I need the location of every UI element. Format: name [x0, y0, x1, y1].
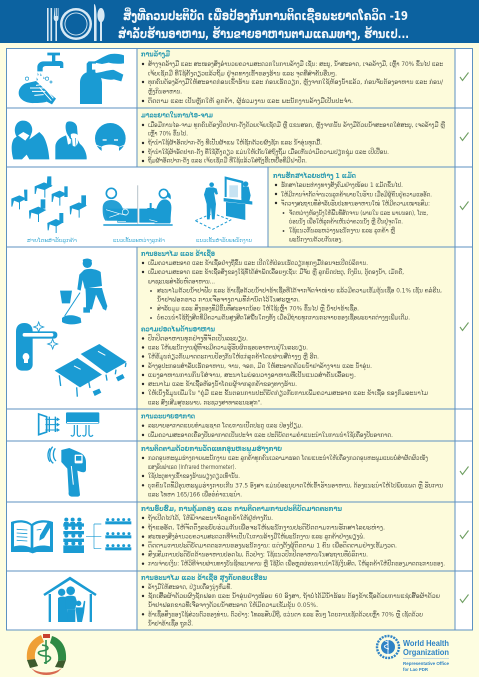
- text: temperature screening: ແລະ ໂທຫາ 165/166 ເພື່ອຂໍຄຳແນະນຳ.: [148, 491, 242, 498]
- caption: customer table spacing: ສາຍໂຕະສຳລັບລູກຄ້າ: [27, 237, 77, 244]
- text: temperature screening: ກວດອຸນຫະພູມຮ່າງກາຍພະນັກງານ ແລະ ລູກຄ້າທຸກຄົນເວລາມາຮອດ ໂດຍແນະນຳໃຫ້ເຄື່ອງກວດອຸນຫະພູມແບບບໍ່ສຳຜັດຜິວໜັງ: [148, 455, 428, 462]
- text: cough etiquette: ຖ້ານຳໃຊ້ຜ້າອັດປາກ-ດັງ ທີ່ໃຊ້ຄັ້ງດຽວ ແມ່ນໃຫ້ເກັບໃສ່ຖົງຖິ້ມ ເມື່ອເຫັນວ່າມີຄວາມປຽກຊຸ່ມ ແລະ ເປິເປື້ອນ.: [148, 148, 389, 157]
- text: hand washing: ຕິດຕາມ ແລະ ເປັນຫຼັກໃຫ້ ລູກຄ້າ, ຜູ້ຮ່ວມງານ ແລະ ພະນັກງານລ້າງມືເປັນປະຈຳ.: [148, 97, 353, 105]
- text: food safety: ໃຫ້ຂໍ້ມູນກ່ຽວກັບມາດຕະການປ້ອງກັນໃຫ້ແກ່ລູກຄ້າໂດຍຜ່ານສື່ຕ່າງໆ ຫຼື ຮີດ.: [148, 353, 319, 361]
- text: temperature screening: ໃຊ້ປະຕູທາງເຂົ້າຂອງຮ້ານພຽງດຽວເທົ່ານັ້ນ.: [148, 473, 240, 480]
- text: training and monitoring: ສະໜອງສິ່ງອຳນວຍຄວາມສະດວກທີ່ຈຳເປັນໃນການລ້າງມືໃຫ້ພະນັກງານ ແລະ ລູກຄ້າຢ່າງພຽງພໍ.: [148, 533, 365, 541]
- illustration: distanced tables, screens and staff: [11, 176, 252, 233]
- text: cleaning and disinfection: ນ້ຳຢາຟອກຂາວ ການເຈືອຈາງຕາມທີ່ກຳນົດໄວ້ໃນສະຫຼາກ.: [157, 295, 300, 303]
- text: temperature screening: ບຸກຄົນໃດທີ່ມີອຸນຫະພູມຮ່າງກາຍເກີນ 37.5 ອົງສາ ແມ່ນບໍ່ອະນຸຍາດໃຫ້ເຂົ້າຮ້ານອາຫານ, ຕ້ອງແນະນຳໃຫ້ໄປພົບແພດ ຫຼື ຮັບການ: [148, 481, 443, 489]
- text: food safety: ຄວາມປອດໄພດ້ານອາຫານ: [141, 324, 215, 334]
- text: ventilation: ການລະບາຍອາກາດ: [141, 413, 195, 421]
- text: physical distancing: ການຮັກສາໄລຍະຫ່າງ 1 ແມັດ: [273, 171, 356, 180]
- icon: coughing people and face mask: [12, 121, 126, 159]
- panel: physical distancing: [11, 171, 432, 244]
- text: food safety: ແລະ ໃຫ້ພະນັກງານຜູ້ທີ່ຈະມີຄວາມຮູ້ຮັບຜິດຊອບອາຫານຢູ່ໃນລະບຽບ.: [148, 344, 308, 351]
- text: cough etiquette: ຖ້ານຳໃຊ້ຜ້າອັດປາກ-ດັງ ທີ່ເປັນຜ້າແພ ໃຫ້ຊັກດ້ວຍຜົງຊັກ ແລະ ນ້ຳອຸ່ນທຸກມື້.: [148, 139, 322, 147]
- text: food safety: ແຍງອາຫານການກິນໃສ່ຈານ, ສະນາໄມບ່ອນວາງອາຫານທີ່ເປັນແນວສຳຄັນເລື້ອຍໆ.: [148, 371, 356, 379]
- text: training and monitoring: [141, 504, 445, 568]
- illustration: cleaner, door handle and tables: [16, 259, 127, 397]
- logo: World Health Organization: Representative Office: [403, 661, 450, 666]
- icon: small staff groups: [105, 518, 131, 550]
- caption: partition for staff: ແນວເຂັ້ນສຳລັບພະນັກງານ: [196, 237, 252, 244]
- icon: WHO globe: [377, 636, 399, 658]
- text: cleaning and disinfection: [141, 249, 442, 322]
- logo: World Health Organization: Organization: [403, 647, 449, 657]
- header banner: [0, 0, 479, 43]
- text: training and monitoring: ການອົບຮົມ, ການຄຸ້ມຄອງ ແລະ ການຕິດຕາມການປະຕິບັດມາດຕະການ: [141, 504, 342, 514]
- text: hand washing: [141, 50, 443, 105]
- icon: book, pencil and staff groups: [11, 518, 131, 553]
- text: cough etiquette: ເຫຼົ້າ 70% ຂຶ້ນໄປ.: [148, 130, 188, 138]
- text: cleaning at home: ລ້າງມືໃຫ້ສະອາດ, ປ່ຽນເຄື່ອງນຸ່ງຫົ່ມທີ່.: [148, 584, 232, 591]
- icon: person mopping: [60, 259, 107, 324]
- text: cleaning and disinfection: ການອະນາໄມ ແລະ ຂ້າເຊື້ອ: [141, 249, 215, 258]
- title: ສຳລັບຮ້ານອາຫານ, ຮ້ານຂາຍອາຫານຕາມແຄມທາງ, ຮ້ານເປ...: [118, 26, 409, 41]
- text: temperature screening: ການຕິດຕາມດ້ວຍການວັດແທກອຸນຫະພູມຮ່າງກາຍ: [141, 444, 282, 454]
- text: cleaning and disinfection: ເພີ່ມຄວາມສະອາດ ແລະ ຂ້າເຊື້ອສິ່ງຂອງໃຊ້ທີ່ໄດ້ສຳພັດເລື້ອຍໆເຊັ່ນ: ມືຈັບ ຫຼື ລູກບິດປະຕູ, ກົງບິນ, ຕູ້ຄອງນ້ຳ, ເມັກຄື,: [148, 268, 404, 276]
- text: cleaning at home: ການອະນາໄມ ແລະ ຂ້າເຊື້ອ ສຸງກັບຄອບເຮືອນ: [141, 573, 267, 583]
- text: cleaning and disinfection: ເພີ່ມຄວາມສະອາດ ແລະ ຂ້າເຊື້ອຢ່າງຖີ່ຂຶ້ນ ແລະ ເປີດໃຫ້ປ່ອນເຮັດວຽກທຸກໆມື້ກ່ອນຈະເປີດບໍລິການ.: [148, 259, 368, 267]
- text: ventilation: [141, 413, 393, 439]
- logo: World Health Organization: [377, 636, 450, 672]
- title: [118, 8, 409, 41]
- text: cleaning and disinfection: ບໍ່ຄວນນຳໃຊ້ຖັງສີດທີ່ມີຄວາມດັນສູງສີດໃສ່ພື້ນໃດໆທັ້ງ ເມື່ອມີຖ່າຍທຸກການກະຈາຍຂອງເຊື້ອພະຍາດຕ່າງໆເພີ່ມເຕີມ.: [157, 315, 410, 322]
- text: training and monitoring: ການຈ່າຍເງິນ: ໃຫ້ວິທີຈ່າຍຜ່ານທາງບັນຊີທະນາຄານ ຫຼື ໃຊ້ບັດ ເພື່ອຫຼຸດຜ່ອນການນຳໃຊ້ເງິນສົດ, ໃຫ້ລູກຄ້າໃຫ້ປົກຂອງມາດຕະການຂອງ.: [148, 560, 445, 568]
- text: physical distancing: ໃຊ້ແນວກັ້ນລະຫວ່າງພະນັກງານ ແລະ ລູກຄ້າ ຫຼື: [289, 228, 396, 235]
- caption: partition between customers: ແນວເຂັ້ນລະຫວ່າງລູກຄ້າ: [113, 237, 165, 244]
- text: hand washing: ສ້າງຈຸດລ້າງມື ແລະ ສະໜອງສິ່ງອຳນວຍຄວາມສະດວກໃນການລ້າງມື ເຊັ່ນ: ສະບູ, ນ້ຳສະອາດ, ເຈລລ້າງມື, ເຫຼົ້າ 70% ຂຶ້ນໄປ ແລະ: [148, 60, 443, 68]
- panel: ventilation: [39, 412, 393, 439]
- check marks column: [460, 72, 468, 602]
- text: physical distancing: [273, 171, 432, 244]
- text: cleaning and disinfection: ພາຊະນະສຳລັບຫົດອາຫານ...: [148, 278, 215, 285]
- text: cough etiquette: ມາລະຍາດໃນການໄອ-ຈາມ: [141, 112, 213, 120]
- panel: training and monitoring: [11, 504, 445, 568]
- icon: family in house: [43, 577, 97, 622]
- logo: World Health Organization: World Health: [403, 638, 449, 648]
- text: hand washing: ທຸກຄົນຕ້ອງລ້າງມືໃຫ້ສະອາດກ່ອນເຂົ້າຮ້ານ ແລະ ກ່ອນເຮັດວຽກ, ຫຼັງຈາກໃຊ້ຫ້ອງນ້ຳແລ້ວ, ກ່ອນຈັບຕ້ອງອາຫານ ແລະ ກ່ອນ/: [148, 79, 443, 86]
- text: cough etiquette: ເມື່ອມີການໄອ-ຈາມ ທຸກຄົນຕ້ອງປິດປາກ-ດັງດ້ວຍເຈ້ຍເຊັດມື ຫຼື ແຂນສອກ, ຫຼັງຈາກນັ້ນ ລ້າງມືດ້ວຍນ້ຳສະອາດໃສ່ສະບູ, ເຈລລ້າງມື ຫຼື: [148, 121, 446, 129]
- text: cough etiquette: [141, 112, 446, 165]
- icon: cleaned tables: [55, 344, 127, 397]
- icon: soap dispenser: [80, 54, 124, 104]
- text: hand washing: ເຈ້ຍເຊັດມື ທີ່ໃຊ້ຄັ້ງດຽວແລ້ວຖິ້ມ ຢູ່ຈຸດທາງເຂົ້າຂອງຮ້ານ ແລະ ຈຸດທີ່ສຳຄັນອື່ນໆ.: [148, 70, 337, 78]
- text: cleaning at home: ຂ້າເຊື້ອສິ່ງຂອງໃຊ້ສ່ວນຕົວຂອງທ່ານ, ຕົວຢ່າງ: ໂທລະສັບມືຖື, ແວ່ນຕາ ແລະ ອື່ນໆ ໂດຍການເຊັດດ້ວຍເຫຼົ້າ 70% ຫຼື ເຊັດດ້ວຍ: [148, 611, 423, 618]
- text: training and monitoring: ສົ່ງເສີມການປະຕິບັດດ້ານອາຫານປອດໄພ, ຕົວຢ່າງ: ໃຊ້ແນວປົກປິດອາຫານໃນສະຖານທີ່ບໍລິການ.: [148, 550, 368, 558]
- icon: open book: [11, 520, 53, 553]
- text: physical distancing: ຈັດຫວ່າງຫ້ອງນັ່ງໃຫ້ພື້ນທີ່ສັດຈານ (ພາຍໃນ ແລະ ພາຍນອກ), ໂຕະ,: [289, 210, 428, 217]
- text: cough etiquette: ຖິ້ມຜ້າອັດປາກ-ດັງ ແລະ ເຈ້ຍເຊັດມື ທີ່ໃຊ້ແລ້ວໃສ່ຖັງຂີ້ເຫຍື້ອທີ່ມີຝາປິດ.: [148, 157, 307, 165]
- text: food safety: ໃຫ້ເບິ່ງຂໍ້ມູນເພີ່ມໃນ "ຄູ່ມື ແລະ ຂັ້ນຕອນການປະຕິບັດກ່ຽວກັບການເພີ່ມຄວາມສະອາດ ແລະ ຂ້າເຊື້ອ ຂອງກົມອະນາໄມ: [148, 389, 428, 397]
- text: hand washing: ການລ້າງມື: [141, 50, 171, 58]
- text: temperature screening: ແສງອິນຟາເຣດ (Infrared thermometer).: [148, 464, 236, 471]
- icon: standing staff behind screen: [195, 176, 252, 229]
- text: training and monitoring: ຖ້າແອອັດ, ໃຫ້ຈັດຕິ່ງລະບົບຮ່ວມກັນເພື່ອຈະໃຫ້ພະນັກງານປະຕິບັດຕາມການຮັກສາໄລຍະຫ່າງ.: [148, 523, 385, 531]
- text: physical distancing: ຮັກສາໄລຍະຫ່າງທາງສັງຄົມຢ່າງໜ້ອຍ 1 ແມັດຂຶ້ນໄປ.: [281, 181, 403, 189]
- text: food safety: [141, 324, 428, 407]
- text: food safety: ສະນາໄມ ແລະ ຂ້າເຊື້ອຫ້ອງນ້ຳໂດຍຜູ້ຈາກລູກຄ້າຂອງທາງຮ້ານ.: [148, 380, 297, 388]
- logo: Lao Ministry of Health emblem: [27, 634, 66, 675]
- text: cleaning and disinfection: ສະນາໄມດ້ວຍນ້ຳຢາຟັບ ແລະ ຂ້າເຊື້ອດ້ວຍນ້ຳຢາຂ້າເຊື້ອທີ່ໄດ້ຈາກຈັດຈຳໜ່າຍ ແລ້ວມີຄວາມເຂັ້ມຂຸ້ນເຊື້ອ 0.1% ເຊັ່ນ ຄລໍຣີນ,: [157, 287, 442, 295]
- panel: temperature screening: [48, 444, 443, 498]
- text: physical distancing: ຈັດວາງສະຖານທີ່ສຳລັບຮັບປະທານອາຫານໃໝ່ ໃຫ້ມີຄວາມເໝາະສົມ:: [281, 200, 430, 207]
- text: food safety: ແລະ ສົ່ງເສີມສຸຂະພາບ, ກະຊວງສາທາລະນະສຸກ".: [148, 400, 262, 407]
- title: ສິ່ງທີ່ຄວນປະຕິບັດ ເພື່ອປ້ອງກັນການຕິດເຊື້ອພະຍາດໂຄວິດ -19: [123, 8, 408, 24]
- icon: plate and cutlery: [47, 4, 105, 41]
- text: cleaning at home: ຊັກເສື້ອຜ້າດ້ວຍຜົງຊັກຟອກ ແລະ ນ້ຳອຸ່ນຢ່າງໜ້ອຍ 60 ອົງສາ, ຖ້າບໍ່ໄດ້ມີນ້ຳຮ້ອນ ຕ້ອງຂ້າເຊື້ອດ້ວຍການແຊ່ເສື້ອຜ້າດ້ວຍ: [148, 592, 440, 600]
- text: food safety: ລ້າງອຸປະກອນສຳລັບເຮັດອາຫານ, ຈານ, ຈອກ, ມີດ ໃຫ້ສະອາດດ້ວຍນ້ຳຢາລ້າງຈານ ແລະ ນ້ຳອຸ່ນ.: [148, 363, 372, 370]
- text: cleaning at home: ນ້ຳຢາຂ້າເຊື້ອ ຖູກວີ.: [148, 620, 193, 628]
- panel: hand washing: [19, 50, 443, 105]
- text: hand washing: ຫຼັງກິນອາຫານ.: [148, 88, 182, 96]
- icon: tap and washing hands: [19, 53, 124, 104]
- text: food safety: ປົກປິດອາຫານທຸກຢ່າງທີ່ຈັດເປັນລະບຽບ.: [148, 335, 248, 342]
- text: temperature screening: [141, 444, 443, 498]
- text: physical distancing: ໃຫ້ມີການຈຳກັດຈຳນວນລູກຄ້າພາຍໃນຮ້ານ ເມື່ອມີຜູ້ຄົນຢູ່ຄວາມແອອັດ.: [281, 191, 432, 198]
- icon: distribution arrows: [86, 524, 101, 549]
- icon: spaced tables: [11, 176, 87, 233]
- panel: cough etiquette: [12, 112, 446, 165]
- text: ventilation: ລະບາຍອາກາດແບບທຳມະຊາດ ໂດຍການເປີດປະຕູ ແລະ ປ່ອງຢ້ຽມ.: [148, 422, 303, 430]
- logo: World Health Organization: for Lao PDR: [403, 667, 428, 672]
- text: physical distancing: ບ່ອນນັ່ງ ເພື່ອໃຫ້ລູກຄ້າເຫັນວ່າຄວນນັ່ງ ຫຼື ຢືນຢູ່ຈຸດໃດ.: [289, 219, 403, 226]
- panel: cleaning and food safety: [16, 249, 442, 407]
- icon: crowd group: [63, 518, 84, 553]
- text: training and monitoring: ຕິດຕາມການປະຕິບັດມາດຕະການຂອງພະນັກງານ: ແຕ່ງຕັ້ງຜູ້ຕິດຕາມ 1 ຄົນ ເພື່ອຕິດຕາມຢ່າງເຂັ້ມງວດ.: [148, 542, 397, 549]
- text: cleaning at home: ນ້ຳຢາຟອກຂາວທີ່ເຈືອຈາງດ້ວຍນ້ຳສະອາດ ໃຫ້ມີຄວາມເຂັ້ມຂຸ້ນ 0.05%.: [148, 602, 318, 609]
- text: ventilation: ເພີ່ມຄວາມສະອາດເຄື່ອງປັບອາກາດເປັນປະຈຳ ແລະ ປະຕິບັດຕາມຄຳແນະນຳໃນການນຳໃຊ້ເຄື່ອງປັບອາກາດ.: [148, 431, 393, 439]
- icon: infrared thermometer: [48, 447, 86, 497]
- text: cleaning and disinfection: ສຳລັບມຸມ ແລະ ສິ່ງຂອງທີ່ມີຂີ້ນທີ່ສະອາດນ້ອຍ ໃຫ້ໃຊ້ເຫຼົ້າ 70% ຂຶ້ນໄປ ຫຼື ນ້ຳຢາຂ້າເຊື້ອ.: [157, 304, 359, 312]
- icon: door handle: [16, 322, 58, 371]
- icon: window and air conditioner: [39, 412, 99, 436]
- panel: cleaning at home: [43, 573, 440, 628]
- icon: seated customers with partition: [103, 185, 173, 226]
- text: training and monitoring: ຖ້າເປີດໄປໄດ້, ໃຫ້ພິຈາລະນາຈັດລູກຄ້າໃຫ້ຢູ່ຫ່າງກັນ.: [148, 514, 273, 522]
- text: physical distancing: ພະນັກງານດ້ວຍກັນເອງ.: [289, 237, 343, 244]
- text: cleaning at home: [141, 573, 440, 628]
